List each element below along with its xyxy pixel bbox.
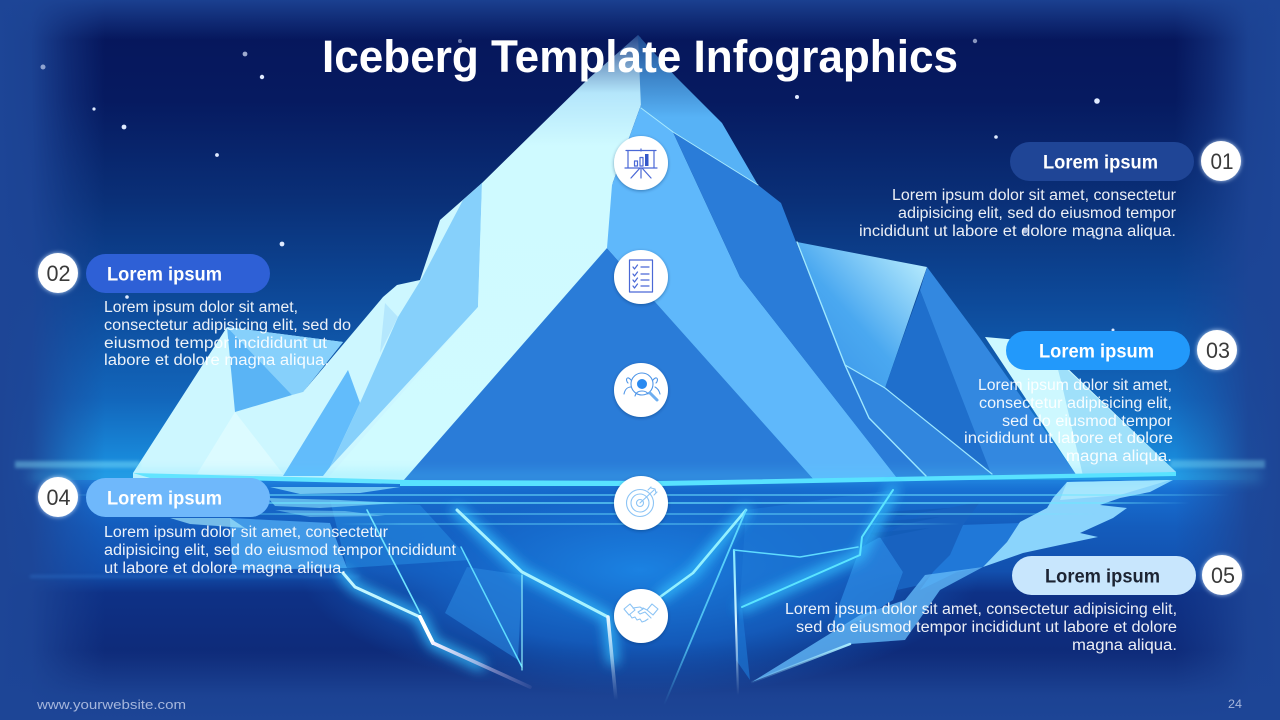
text 01: incididunt ut labore et dolore magna aliqua. — [859, 223, 1176, 240]
cracks: core lines — [343, 490, 893, 705]
icon: people search — [614, 363, 668, 417]
text 02: eiusmod tempor incididunt ut — [104, 335, 328, 352]
number 05: 05 — [1211, 563, 1235, 588]
number 04 — [38, 477, 78, 517]
pill 02: Lorem ipsum — [107, 264, 222, 286]
icon: target — [614, 476, 668, 530]
iceberg above water — [133, 35, 1176, 481]
item 04 — [38, 477, 457, 577]
water surface lines — [15, 460, 1265, 578]
number 01 — [1201, 141, 1241, 181]
reflection: left ripples — [270, 487, 400, 494]
reflection: right facets — [830, 537, 903, 630]
page number: 24 — [1228, 697, 1242, 711]
item 05 — [785, 555, 1242, 654]
icon: checklist — [614, 250, 668, 304]
iceberg: right gradient face — [797, 242, 927, 388]
number 01: 01 — [1210, 149, 1234, 174]
icon: handshake — [614, 589, 668, 643]
text 05: magna aliqua. — [1072, 637, 1177, 654]
underwater glowing cracks — [343, 490, 893, 705]
text 01 — [859, 187, 1176, 240]
text 03: consectetur adipisicing elit, — [979, 395, 1172, 412]
pill 04: Lorem ipsum — [107, 488, 222, 510]
stars — [40, 39, 1114, 332]
text 04: ut labore et dolore magna aliqua. — [104, 560, 346, 577]
text 05 — [785, 601, 1177, 654]
iceberg: left silhouette — [133, 183, 641, 480]
text 05: Lorem ipsum dolor sit amet, consectetur adipisicing elit, — [785, 601, 1177, 618]
text 04 — [104, 524, 457, 577]
text 03 — [964, 377, 1173, 465]
text 04: adipisicing elit, sed do eiusmod tempor incididunt — [104, 542, 457, 559]
text 01: adipisicing elit, sed do eiusmod tempor — [898, 205, 1176, 222]
pill 04 — [86, 478, 270, 517]
text 03: incididunt ut labore et dolore — [964, 430, 1173, 447]
pill 05 — [1012, 556, 1196, 595]
text 04: Lorem ipsum dolor sit amet, consectetur — [104, 524, 388, 541]
item 02 — [38, 253, 351, 369]
text 03: Lorem ipsum dolor sit amet, — [978, 377, 1172, 394]
reflection: centre facet — [736, 490, 893, 680]
text 01: Lorem ipsum dolor sit amet, consectetur — [892, 187, 1176, 204]
pill 03 — [1006, 331, 1190, 370]
pill 01 — [1010, 142, 1194, 181]
reflection: left facets — [230, 518, 347, 570]
text 02: Lorem ipsum dolor sit amet, — [104, 299, 298, 316]
number 04: 04 — [46, 485, 70, 510]
number 03: 03 — [1206, 338, 1230, 363]
text 03: magna aliqua. — [1066, 448, 1172, 465]
text 05: sed do eiusmod tempor incididunt ut labore et dolore — [796, 619, 1177, 636]
text 02 — [104, 299, 351, 369]
text 02: labore et dolore magna aliqua. — [104, 352, 329, 369]
pill 05: Lorem ipsum — [1045, 566, 1160, 588]
iceberg: central dark face — [403, 248, 815, 481]
text 02: consectetur adipisicing elit, sed do — [104, 317, 351, 334]
iceberg: central white band — [325, 35, 641, 481]
pill 03: Lorem ipsum — [1039, 342, 1154, 362]
underwater iceberg reflection — [170, 480, 1173, 682]
underwater glow — [300, 445, 980, 695]
pill 02 — [86, 254, 270, 293]
pill 01: Lorem ipsum — [1043, 152, 1158, 174]
iceberg: right white face — [985, 337, 1176, 476]
iceberg: dark right face — [673, 132, 926, 478]
number 05 — [1202, 555, 1242, 595]
icon: presentation board — [614, 136, 668, 190]
item 03 — [964, 330, 1237, 465]
number 03 — [1197, 330, 1237, 370]
text 03: sed do eiusmod tempor — [1002, 413, 1172, 430]
cracks: glow — [343, 490, 893, 665]
title: Iceberg Template Infographics — [322, 31, 958, 82]
item 01 — [859, 141, 1241, 240]
reflection: dark ripple strokes — [870, 508, 950, 538]
number 02: 02 — [46, 261, 70, 286]
central icon column — [614, 136, 668, 643]
iceberg: middle light band — [607, 105, 897, 481]
footer website: www.yourwebsite.com — [36, 697, 186, 712]
number 02 — [38, 253, 78, 293]
